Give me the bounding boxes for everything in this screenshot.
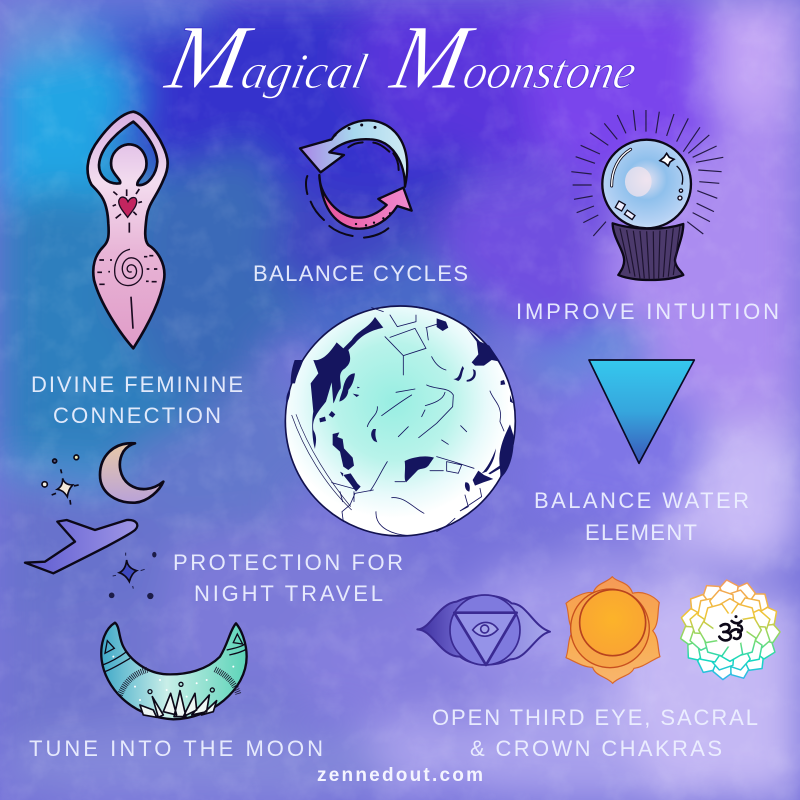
- dashes: [306, 142, 399, 238]
- title: Moonstone: [382, 7, 649, 109]
- moon lotus points: [140, 691, 217, 717]
- petals: [566, 577, 660, 683]
- title: Magical: [157, 7, 380, 109]
- teal mandala moon: [101, 623, 247, 719]
- label: improve intuition: IMPROVE INTUITION: [516, 299, 779, 324]
- inner sun circle: [580, 590, 646, 656]
- glass sphere: [602, 140, 691, 228]
- label: divine feminine connection: CONNECTION: [53, 403, 221, 428]
- label: tune into the moon: TUNE INTO THE MOON: [29, 736, 323, 761]
- icon: balance cycle arrows: [300, 120, 412, 238]
- dark inclusions: [286, 317, 514, 492]
- label: balance cycles: BALANCE CYCLES: [253, 261, 468, 286]
- sphere cloud: [625, 167, 652, 197]
- label: protection for night travel: [173, 550, 403, 606]
- upper sparkle: [57, 478, 73, 497]
- stand ribbing: [620, 226, 680, 279]
- label: divine feminine connection: [31, 372, 243, 428]
- pupil: [481, 625, 489, 633]
- hip marks: [97, 256, 157, 329]
- petals: [417, 596, 550, 665]
- sphere sparkle: [660, 153, 674, 166]
- sphere marks: [615, 166, 683, 220]
- airplane: [25, 520, 137, 573]
- stand: [613, 223, 683, 280]
- crack lines: [332, 307, 504, 536]
- label: open third eye, sacral and crown chakras: & CROWN CHAKRAS: [470, 736, 722, 761]
- upper arrow dots: [335, 125, 375, 135]
- icon: moonstone: [285, 306, 515, 536]
- om symbol: [719, 617, 742, 640]
- eye: [473, 622, 498, 636]
- heart rays: [113, 189, 142, 233]
- title: [157, 7, 649, 109]
- icon: sacral chakra: [566, 577, 660, 683]
- moon speckles: [113, 657, 233, 700]
- lower arrow: [319, 175, 412, 229]
- sphere highlights: [612, 149, 631, 186]
- moon bands: [103, 634, 246, 694]
- icon: crystal ball: [571, 110, 723, 280]
- moon hatched bands: [120, 669, 238, 695]
- icon: goddess figure: [88, 112, 168, 348]
- icon: water triangle: [589, 360, 694, 463]
- crescent: [100, 443, 163, 503]
- label: balance water element: [534, 488, 749, 545]
- label: protection for night travel: NIGHT TRAVEL: [194, 581, 383, 606]
- label: balance water element: BALANCE WATER: [534, 488, 749, 513]
- upper dots and rays: [42, 455, 79, 505]
- spiral: [115, 249, 142, 286]
- lower sparkle: [119, 560, 137, 582]
- circle: [450, 595, 520, 665]
- label: protection for night travel: PROTECTION FOR: [173, 550, 403, 575]
- icon: third eye chakra: [417, 595, 550, 665]
- upper arrow: [300, 120, 407, 187]
- triangle: [454, 613, 517, 665]
- lotus fill: [679, 580, 781, 681]
- label: divine feminine connection: DIVINE FEMININE: [31, 372, 243, 397]
- stone sheen: [292, 414, 352, 510]
- label: open third eye, sacral and crown chakras: OPEN THIRD EYE, SACRAL: [432, 705, 758, 730]
- heart: [119, 197, 137, 217]
- footer url: zennedout.com: [317, 765, 483, 786]
- rays: [571, 110, 723, 236]
- icon: crescent moon and stars: [25, 443, 247, 719]
- label: balance water element: ELEMENT: [585, 520, 697, 545]
- lower arrow dots: [356, 213, 390, 225]
- stone body: [285, 306, 515, 536]
- lotus outlines: [680, 579, 781, 680]
- label: open third eye, sacral and crown chakras: [432, 705, 758, 761]
- icon: crown chakra: [680, 579, 781, 680]
- outer crescent circle: [571, 589, 649, 668]
- lower dots and rays: [109, 552, 156, 599]
